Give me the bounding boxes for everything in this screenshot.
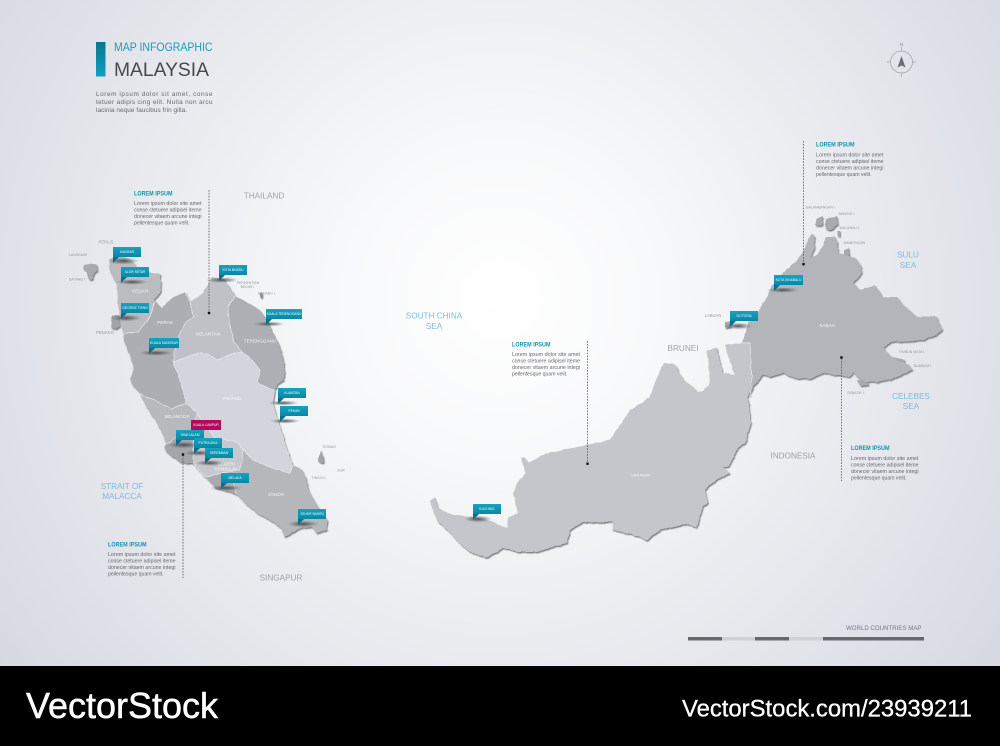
pin: kuantan [268,388,306,406]
pin: shah alam [167,430,204,448]
sea labels [101,250,930,501]
callout: sabah north: LOREM IPSUM [816,142,854,148]
island labels: TIMBUN MATA I. [899,350,925,354]
region labels: TERENGGANU [244,338,276,344]
callout: sarawak: LOREM IPSUM [512,342,550,348]
state: kuala lumpur area [165,430,194,464]
island: perhentian [260,292,263,298]
island labels: PENANG [96,330,114,335]
state: terengganu [228,296,285,390]
island labels: AUR [337,468,345,472]
region labels: KEDAH [132,288,148,294]
pin: seremban: SEREMBAN [210,451,229,455]
callout: sabah south: donecer vitaem arcune integi [851,469,918,475]
footer logo: VectorStock [26,685,219,726]
region labels: PAHANG [222,396,242,401]
pin: melaka [210,473,249,491]
pin: johor bahru: JOHOR BAHRU [300,512,325,516]
country labels [244,192,816,582]
region labels: PERAK [157,320,174,325]
sea labels: SEA [426,322,443,331]
region labels [132,288,835,497]
callout: kelantan: LOREM IPSUM [134,192,172,198]
state: pahang [173,352,293,473]
sea labels: SEA [900,261,917,270]
main title: MALAYSIA [114,59,209,81]
state: negeri sembilan [193,413,243,477]
country labels: SINGAPUR [260,574,302,582]
country labels: INDONESIA [770,452,816,460]
pin: kuala kangsar [139,338,179,356]
intro text: Lorem ipsum dolor sit amet, conse [96,91,213,98]
pin: kangar [107,247,141,264]
pin: kuala lumpur capital [191,420,221,430]
region labels: NEGERI [217,462,235,466]
pin: kuala lumpur capital: KUALA LUMPUR [193,423,219,427]
island labels: REDANG I. [258,292,276,296]
title block [96,41,213,114]
pin: kuantan: KUANTAN [284,391,300,395]
scale label: WORLD COUNTRIES MAP [846,625,922,632]
eyebrow heading: MAP INFOGRAPHIC [114,41,212,54]
pin: kuala terengganu [253,309,302,326]
state: melaka [194,464,236,494]
pin: kuala kangsar: KUALA KANGSAR [150,341,178,345]
island labels: BUMBUM I. [914,364,932,368]
callout: sarawak: Lorem ipsum dolor site amet [512,352,580,358]
island labels: LABUAN [705,313,721,318]
pin: kota bharu: KOTA BHARU [222,268,244,272]
island labels: JAMBONGAN [843,241,866,245]
scale bar [688,625,924,640]
pin: kangar: KANGAR [120,250,135,254]
callout: sabah south: pellentesque quam velit. [851,476,906,482]
pin: kota kinabalu: KOTA KINABALU [776,278,802,282]
pin: kota kinabalu [767,275,803,293]
pin: george town [110,303,149,322]
region labels: SABAH [819,323,835,328]
island labels: TINGGI I. [312,476,327,480]
footer url: VectorStock.com/23939211 [682,696,972,722]
footer bar [0,666,1000,746]
country labels: THAILAND [244,192,284,200]
pin: george town: GEORGE TOWN [122,306,148,310]
callout: kelantan: donecer vitaem arcune integi [134,214,202,220]
island: langkawi [83,264,98,280]
island labels: DAYANG I [69,278,85,282]
region labels: JOHOR [268,492,285,497]
sea labels: CELEBES [892,392,930,401]
callout: selangor: conse ctetuere adipisel iteme [108,558,176,564]
island: penang [111,315,120,328]
callout: sarawak: donecer vitaem arcune integi [512,365,580,371]
state: johor [222,450,327,537]
callout: selangor: LOREM IPSUM [108,542,146,548]
callout: selangor: donecer vitaem arcune integi [108,565,176,571]
region labels: SELANGOR [164,414,190,419]
callout: kelantan [134,190,210,314]
sea labels: STRAIT OF [101,482,143,491]
title accent bar [96,42,106,76]
pin: putrajaya [184,438,222,456]
pin: seremban [195,448,233,466]
callout: sarawak [512,341,589,465]
state borders [123,292,293,494]
pin: kuala terengganu: KUALA TERENGGANU [267,312,302,316]
state: perak [123,292,193,409]
island labels: LANGKAWI [69,253,87,257]
region labels: SARAWAK [631,472,651,478]
callout: kelantan: pellentesque quam velit. [134,220,190,226]
callout: sabah north: Lorem ipsum dolor site amet [816,152,884,158]
island labels: BANGGI I. [839,212,855,216]
compass needle [898,56,906,68]
callout: sabah south [840,356,919,482]
pin: melaka: MELAKA [228,476,242,480]
callout: sabah south: conse ctetuere adipisel iteme [851,462,918,468]
pin: kuching [464,504,501,522]
pin: victoria: VICTORIA [736,314,753,318]
callout: sabah north: pellentesque quam velit. [816,172,872,178]
callout: selangor: Lorem ipsum dolor site amet [108,552,176,558]
state: selangor [140,394,197,444]
region labels: SEMBILAN [214,466,238,472]
pin: kota bharu [206,265,247,283]
intro text [96,91,213,114]
map: east malaysia [430,216,942,558]
pin: johor bahru [287,509,326,528]
state: sarawak [430,343,752,558]
callout: kelantan: Lorem ipsum dolor site amet [134,201,202,207]
callout: selangor: pellentesque quam velit. [108,572,164,578]
intro text: tetuer adipis cing elit. Nulla non arcu [96,99,213,106]
callout: sabah south: Lorem ipsum dolor site amet [851,456,919,462]
islands: sabah [725,216,905,386]
sea labels: SOUTH CHINA [406,312,463,320]
pin: victoria [723,311,758,330]
callout: sarawak: pellentesque quam velit. [512,372,568,378]
pin: alor setar: ALOR SETAR [125,270,146,274]
sea labels: SEA [903,402,920,411]
callout: sabah north [802,141,884,265]
pin: shah alam: SHAH ALAM [181,433,200,437]
island: tioman [318,451,324,463]
pin: putrajaya: PUTRAJAYA [199,441,218,445]
compass north: N [900,42,904,48]
callout: sabah south: LOREM IPSUM [851,446,890,452]
pin: pekan [270,406,308,424]
state: kelantan [173,277,242,362]
sabah border [742,343,752,396]
state: sabah [742,233,942,396]
country labels: BRUNEI [668,344,698,353]
island labels: TIOMAN [322,445,336,449]
callout: kelantan: conse ctetuere adipisel iteme [134,208,202,214]
island labels: PERLIS [99,240,114,244]
callout: sabah north: conse ctetuere adipisel iteme [816,159,884,165]
callout: sabah north: donecer vitaem arcune integi [816,166,884,172]
compass [887,42,916,77]
pin: alor setar [116,267,149,285]
callout: sarawak: conse ctetuere adipisel iteme [512,358,580,364]
island labels: SEBATIK I. [847,391,865,395]
island labels: MALAWALI I. [840,226,860,230]
sea labels: MALACCA [102,492,142,501]
island labels: BESAR I. [241,285,255,289]
island labels: PERHENTIAN [237,281,260,285]
pin: kuching: KUCHING [479,507,495,511]
island labels [69,206,932,480]
sea labels: SULU [897,250,919,260]
state: kedah and perlis [109,256,161,333]
pin: pekan: PEKAN [288,409,300,413]
map: peninsular malaysia [83,256,327,537]
callout: selangor [108,453,184,578]
region labels: KELANTAN [196,332,220,336]
island labels: BALAMBANGAN I. [806,206,836,210]
intro text: lacinia neque faucibus frin gilla. [96,107,187,114]
